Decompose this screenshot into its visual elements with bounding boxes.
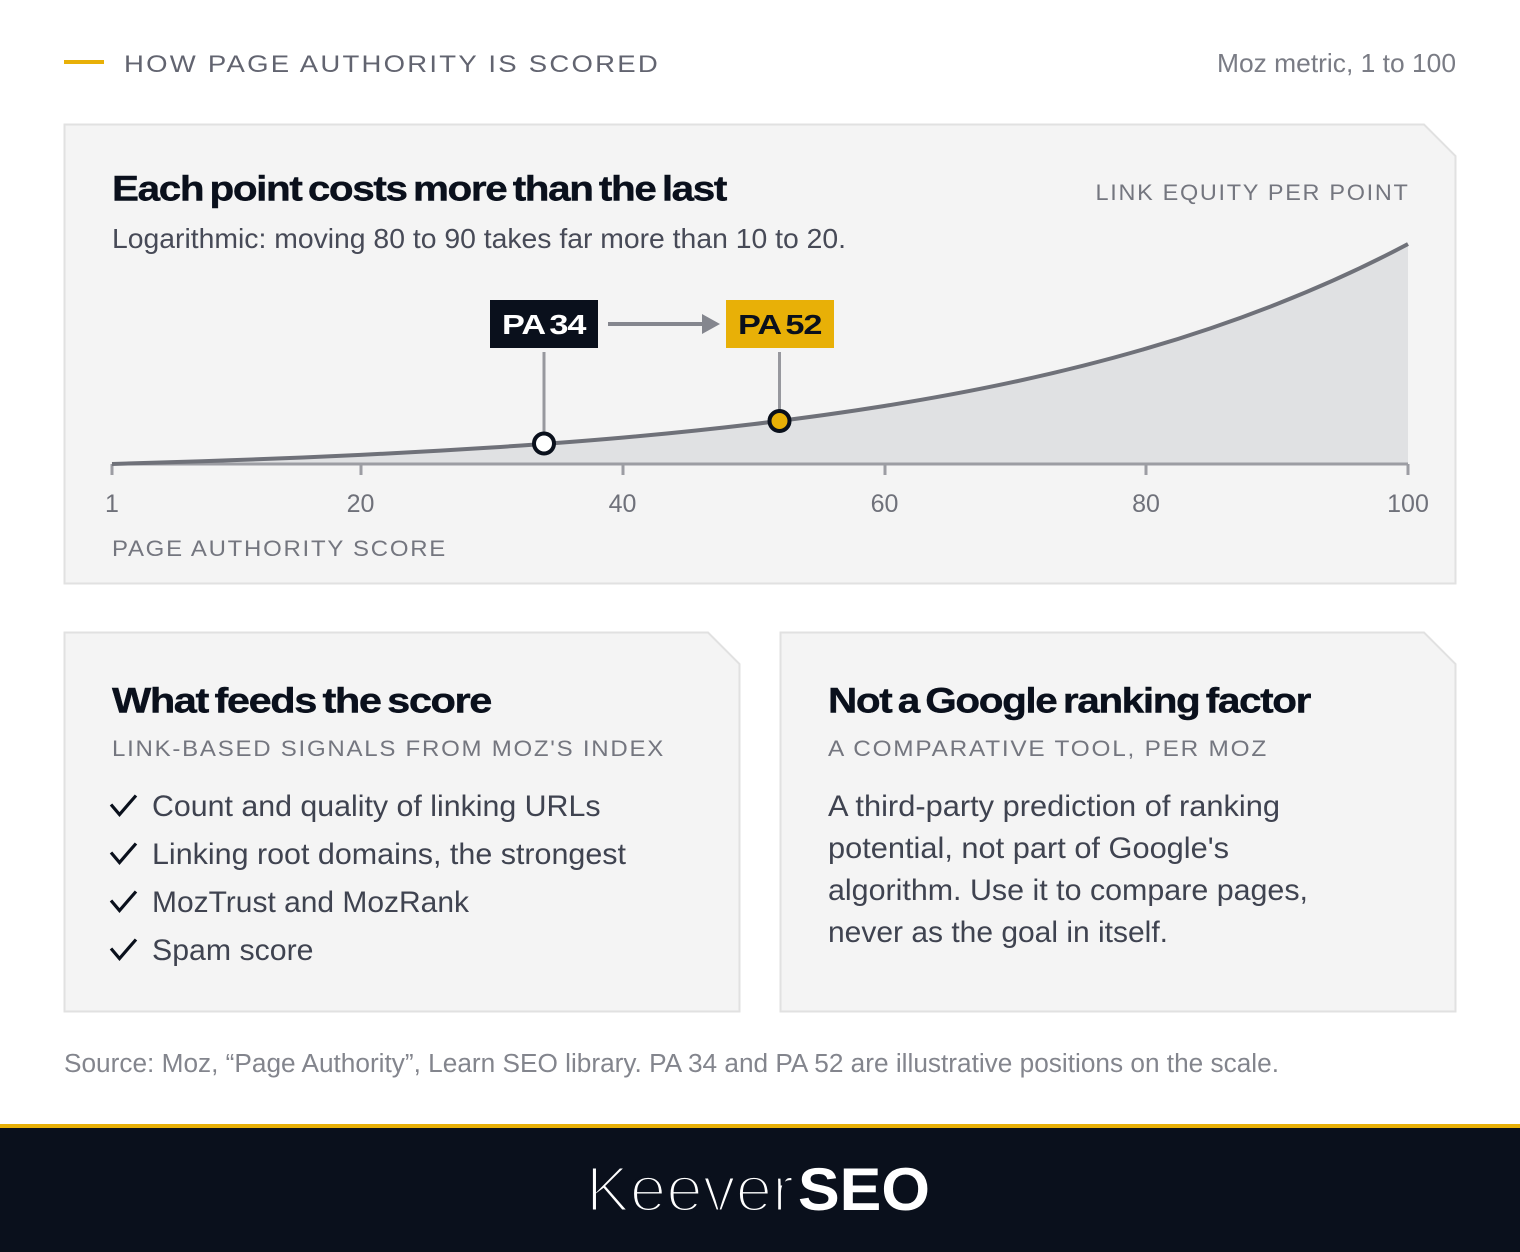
panel: logarithmic curve (64, 124, 1456, 584)
footer accent rule (0, 1124, 1520, 1128)
axis tick labels: 40 (609, 490, 636, 518)
scale note: Moz metric, 1 to 100 (1217, 48, 1456, 78)
panel heading: Not a Google ranking factor (828, 682, 1312, 720)
axis tick labels (105, 490, 1429, 518)
axis tick labels: 20 (347, 490, 374, 518)
area under curve (112, 244, 1408, 464)
arrow (608, 314, 720, 334)
footer band (0, 1128, 1520, 1252)
panel: what feeds the score (64, 632, 740, 1012)
checklist (111, 790, 626, 967)
item 4: Spam score (152, 934, 314, 967)
marker: PA 34 (534, 434, 554, 454)
panel sublabel: LINK-BASED SIGNALS FROM MOZ'S INDEX (112, 736, 665, 761)
panel subtitle: Logarithmic: moving 80 to 90 takes far more than 10 to 20. (112, 223, 846, 254)
header (64, 48, 1456, 78)
logo (586, 1153, 930, 1225)
badge: PA 52 (726, 300, 834, 348)
logo: Keever (586, 1153, 794, 1225)
body paragraph: potential, not part of Google's (828, 832, 1229, 865)
x axis title: PAGE AUTHORITY SCORE (112, 536, 447, 561)
kicker: HOW PAGE AUTHORITY IS SCORED (124, 51, 660, 78)
footer (0, 1124, 1520, 1252)
accent dash (64, 60, 104, 64)
source note: Source: Moz, “Page Authority”, Learn SEO library. PA 34 and PA 52 are illustrative positions on the scale. (64, 1050, 1279, 1078)
item 2: Linking root domains, the strongest (152, 838, 626, 871)
y axis label: LINK EQUITY PER POINT (1096, 180, 1410, 205)
curve chart (105, 244, 1429, 561)
item 1: Count and quality of linking URLs (152, 790, 600, 823)
body paragraph (828, 790, 1308, 949)
badge: PA 34 (490, 300, 598, 348)
panel heading: What feeds the score (112, 682, 492, 720)
marker stems (544, 352, 780, 434)
panel background (64, 124, 1456, 584)
panel heading: Each point costs more than the last (112, 170, 728, 208)
panel: not a Google ranking factor (780, 632, 1456, 1012)
badge: PA 34: PA 34 (502, 309, 587, 340)
axis tick labels: 100 (1387, 490, 1429, 518)
panel sublabel: A COMPARATIVE TOOL, PER MOZ (828, 736, 1268, 761)
axis tick labels: 60 (871, 490, 898, 518)
badge: PA 52: PA 52 (738, 309, 822, 340)
curve line (112, 244, 1408, 464)
marker: PA 52 (770, 411, 790, 431)
item 3: MozTrust and MozRank (152, 886, 469, 919)
axis tick labels: 80 (1132, 490, 1160, 518)
panel background (780, 632, 1456, 1012)
body paragraph: algorithm. Use it to compare pages, (828, 874, 1308, 907)
x axis (112, 464, 1408, 475)
axis tick labels: 1 (105, 490, 119, 518)
panel background (64, 632, 740, 1012)
logo: SEO (798, 1156, 930, 1223)
body paragraph: A third-party prediction of ranking (828, 790, 1280, 823)
body paragraph: never as the goal in itself. (828, 916, 1168, 949)
